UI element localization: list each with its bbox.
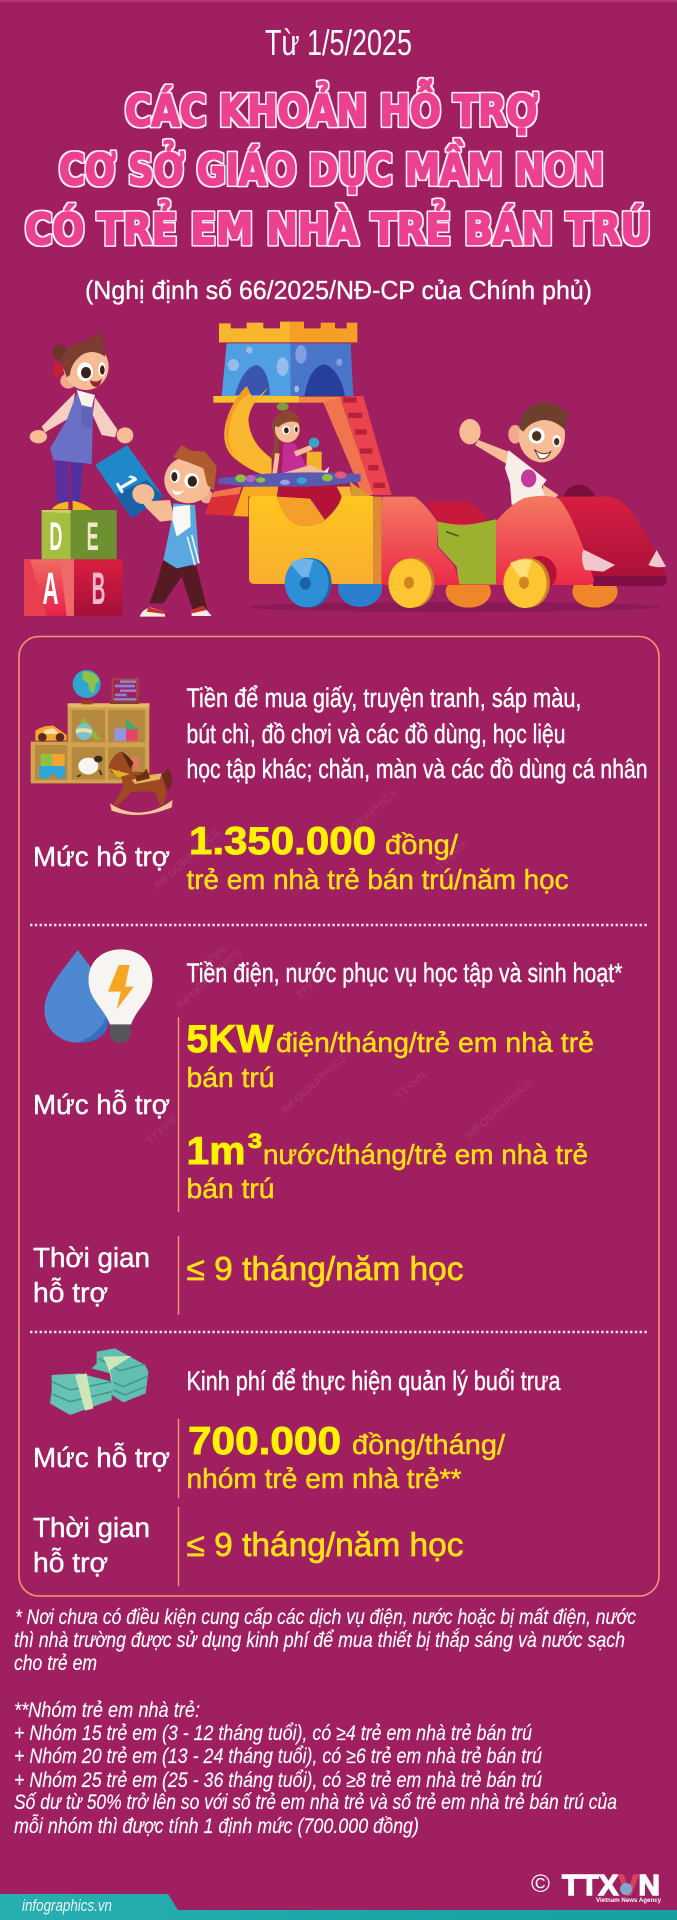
car body xyxy=(382,496,666,608)
value: 700,000: đồng/tháng/ xyxy=(352,1429,505,1460)
watermarks: INFOGRAPHICS xyxy=(464,1077,535,1142)
footnote: electricity and water xyxy=(14,1606,636,1675)
date heading: Từ 1/5/2025 xyxy=(265,22,412,63)
value: 5KW electricity: bán trú xyxy=(186,1062,274,1093)
value: 1 cubic metre water xyxy=(186,1130,588,1204)
watermarks: TTXVN xyxy=(144,1114,179,1147)
rocking horse xyxy=(108,752,173,815)
title xyxy=(25,80,651,255)
value: 1 cubic metre water: 1m xyxy=(186,1130,246,1173)
block: D E: E xyxy=(87,515,99,559)
description: Kinh phí để thực hiện quản lý buổi trưa xyxy=(186,1366,561,1396)
value: duration: ≤ 9 tháng/năm học xyxy=(186,1526,464,1563)
label: support time: Thời gian xyxy=(33,1242,150,1273)
footnote: child groups: mỗi nhóm thì được tính 1 định mức (700.000 đồng) xyxy=(14,1815,419,1838)
footnote: child groups: **Nhóm trẻ em nhà trẻ: xyxy=(14,1699,200,1722)
label: support level: Mức hỗ trợ xyxy=(33,1442,170,1473)
ball pit xyxy=(218,471,361,487)
value: duration: ≤ 9 tháng/năm học xyxy=(186,1250,464,1287)
block: D E xyxy=(42,510,117,559)
boy with book xyxy=(132,445,217,617)
separator: level xyxy=(178,1419,180,1498)
footnote: child groups: + Nhóm 20 trẻ em (13 - 24 tháng tuổi), có ≥6 trẻ em nhà trẻ bán trú xyxy=(14,1745,542,1768)
section: electricity and water xyxy=(33,949,623,1315)
label: support time: Thời gian xyxy=(33,1512,150,1543)
value: 5KW electricity: điện/tháng/trẻ em nhà trẻ xyxy=(276,1027,594,1058)
panel: support items xyxy=(19,636,659,1596)
label: support level: Mức hỗ trợ xyxy=(33,841,170,872)
watermarks: INFOGRAPHICS xyxy=(152,827,223,892)
value: 1 cubic metre water: 3 xyxy=(248,1130,262,1153)
block: D E: D xyxy=(49,515,62,559)
watermarks: TTXVN xyxy=(434,839,469,872)
icon: money stacks xyxy=(50,1348,148,1415)
waving boy xyxy=(459,402,570,505)
watermarks: INFOGRAPHICS xyxy=(279,1052,350,1117)
section: learning materials xyxy=(31,670,647,895)
value: 5KW electricity xyxy=(186,1018,594,1093)
description: Tiền để mua giấy, truyện tranh, sáp màu, xyxy=(186,683,582,713)
pit base xyxy=(205,482,370,520)
footnote: child groups: + Nhóm 15 trẻ em (3 - 12 tháng tuổi), có ≥4 trẻ em nhà trẻ bán trú xyxy=(14,1722,532,1745)
title: CÁC KHOẢN HỖ TRỢ xyxy=(125,80,538,136)
illustration: children playing xyxy=(24,322,667,617)
value: 1,350,000 xyxy=(186,820,568,895)
footnote: child groups xyxy=(14,1699,617,1838)
block: A B: A xyxy=(42,564,59,614)
watermarks xyxy=(144,787,535,1147)
divider xyxy=(30,924,647,926)
watermarks: TTXVN xyxy=(194,944,229,977)
logo: TTXVN: Vietnam News Agency xyxy=(596,1897,661,1904)
divider xyxy=(30,1331,647,1333)
separator: time xyxy=(178,1507,180,1586)
label: support time: hỗ trợ xyxy=(33,1547,108,1578)
logo: TTXVN: TTXVN xyxy=(562,1870,660,1902)
value: 1 cubic metre water: bán trú xyxy=(186,1173,274,1204)
icon: red toy car and waving boy xyxy=(382,402,667,608)
footnote: electricity and water: cho trẻ em xyxy=(14,1652,97,1675)
label: support time xyxy=(33,1242,150,1308)
icon: girl and blocks xyxy=(24,334,217,617)
separator: level xyxy=(178,1017,180,1212)
label: support time xyxy=(33,1512,150,1578)
footnote: child groups: + Nhóm 25 trẻ em (25 - 36 tháng tuổi), có ≥8 trẻ em nhà trẻ bán trú xyxy=(14,1769,542,1792)
block: A B xyxy=(24,559,123,616)
value: 700,000: 700.000 xyxy=(188,1420,341,1463)
icon: toy shelf xyxy=(31,670,173,815)
description: bút chì, đồ chơi và các đồ dùng, học liệu xyxy=(186,719,566,749)
description xyxy=(186,683,648,784)
value: 1 cubic metre water: nước/tháng/trẻ em nhà trẻ xyxy=(263,1139,588,1170)
icon: water drop and bulb xyxy=(44,949,152,1043)
book: number 1: 1 xyxy=(109,469,146,498)
footer site name: infographics.vn xyxy=(22,1896,112,1915)
watermarks: INFOGRAPHICS xyxy=(329,787,400,852)
value: 1,350,000: đồng/ xyxy=(385,829,458,860)
value: 1,350,000: 1.350.000 xyxy=(189,820,376,863)
icon: castle, slide and yellow car front xyxy=(205,322,392,607)
watermarks: TTXVN xyxy=(394,1069,429,1102)
watermarks: INFOGRAPHICS xyxy=(174,947,245,1012)
girl in ball pit xyxy=(267,411,330,481)
section: lunchtime management xyxy=(33,1348,561,1586)
value: 1,350,000: trẻ em nhà trẻ bán trú/năm học xyxy=(186,864,568,895)
value: 5KW electricity: 5KW xyxy=(186,1018,274,1061)
label: support time: hỗ trợ xyxy=(33,1277,108,1308)
watermarks: TTXVN xyxy=(294,969,329,1002)
icon: ground shadow xyxy=(250,602,660,612)
logo: TTXVN: © xyxy=(531,1870,551,1898)
book: number 1 xyxy=(95,445,163,518)
value: 700,000: nhóm trẻ em nhà trẻ** xyxy=(186,1463,462,1494)
separator: time xyxy=(178,1236,180,1315)
subtitle: (Nghị định số 66/2025/NĐ-CP của Chính phủ) xyxy=(85,275,592,305)
label: support level: Mức hỗ trợ xyxy=(33,1089,170,1120)
footer band xyxy=(0,1894,677,1920)
block: A B: B xyxy=(92,565,105,614)
value: 700,000 xyxy=(186,1420,505,1494)
